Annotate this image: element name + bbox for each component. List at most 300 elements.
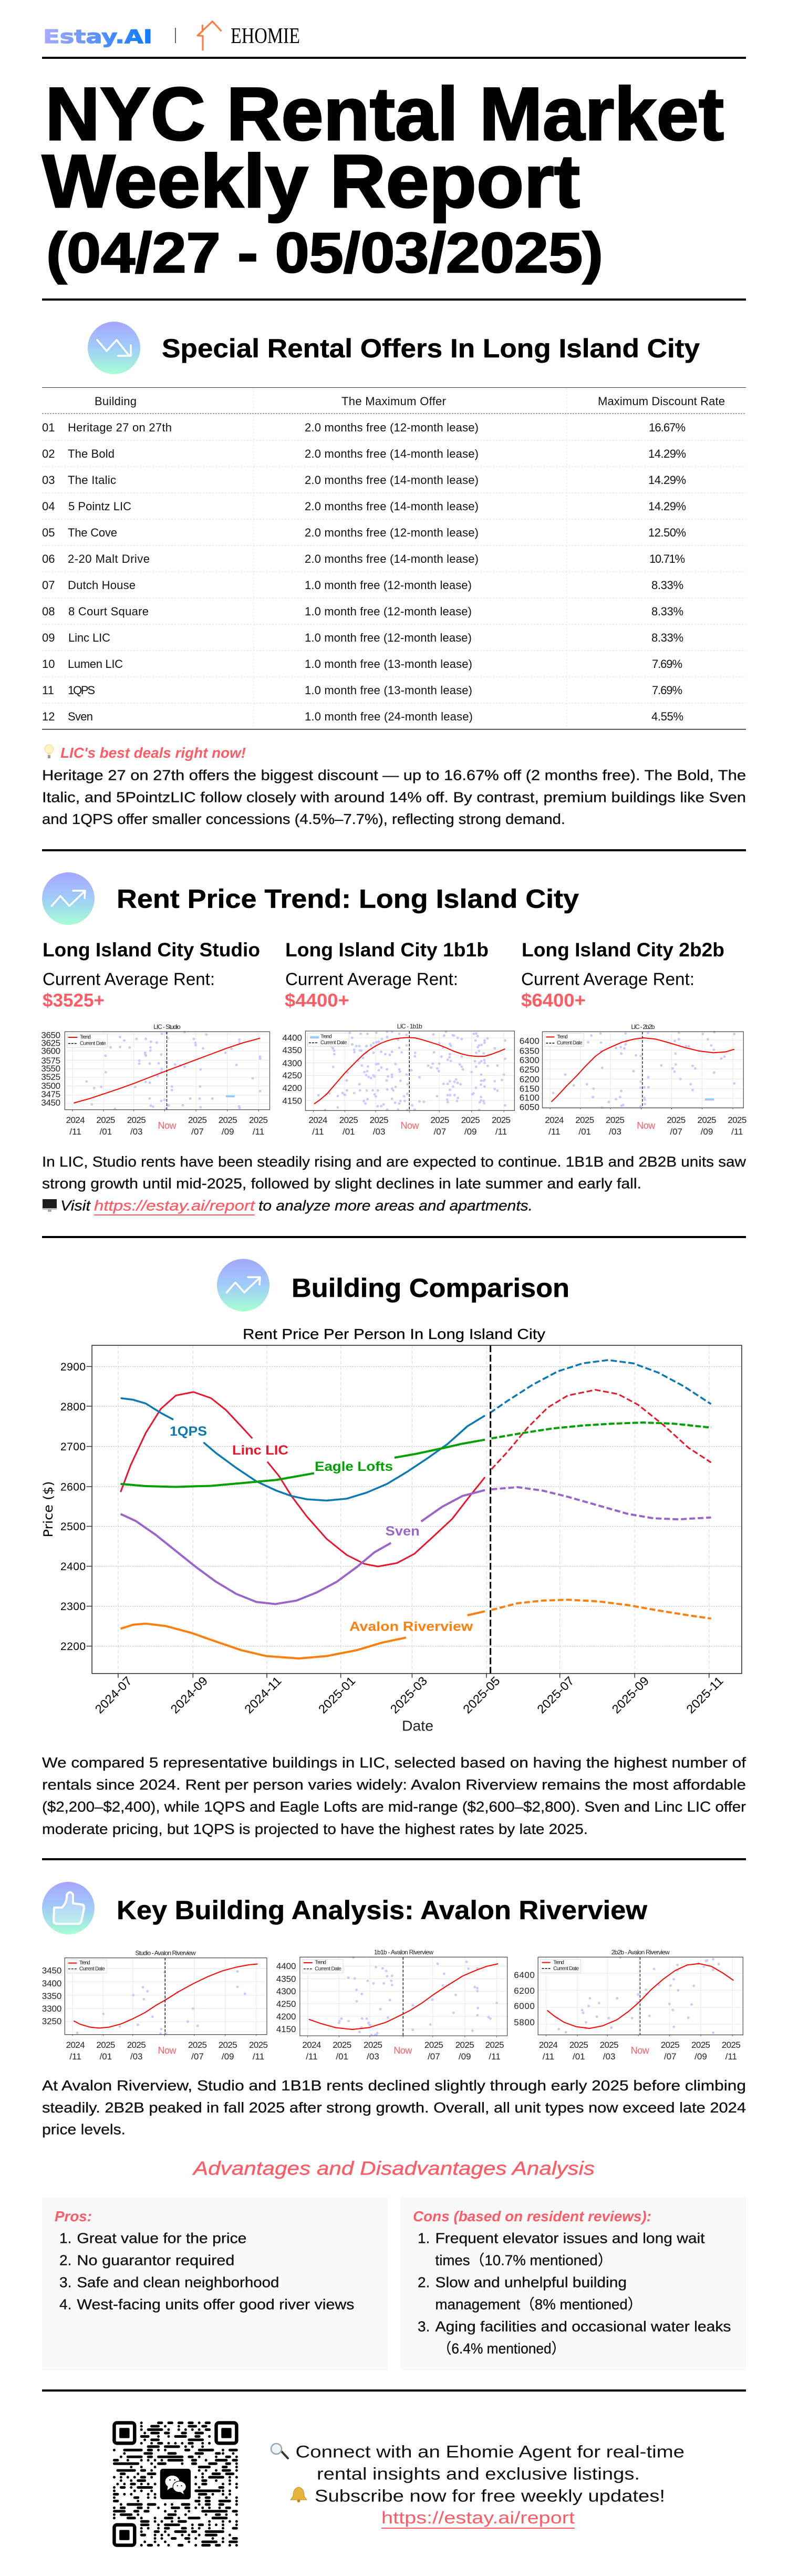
chart: Avalon 2b2b: 2b2b - Avalon Riverview bbox=[611, 1949, 670, 1956]
chart: LIC 2b2b: /03 bbox=[609, 1127, 621, 1137]
chart: Avalon 1b1b: /07 bbox=[428, 2052, 440, 2062]
icon: upward trend bbox=[217, 1259, 269, 1312]
chart: LIC studio: LIC - Studio bbox=[153, 1023, 181, 1031]
table rows: 01 bbox=[42, 421, 55, 434]
icon: monitor bbox=[43, 1199, 57, 1212]
x axis labels: 2025-11 bbox=[683, 1674, 726, 1716]
table rows: 08 bbox=[42, 605, 55, 618]
list: pros: 2. bbox=[59, 2252, 71, 2269]
list: cons bbox=[418, 2230, 731, 2356]
line labels: Linc LIC bbox=[232, 1443, 288, 1458]
chart: LIC studio: 2025 bbox=[249, 1115, 268, 1125]
list: cons: （6.4% mentioned） bbox=[438, 2340, 565, 2356]
x axis labels: 2025-01 bbox=[316, 1674, 358, 1716]
chart: Avalon studio: 2025 bbox=[127, 2040, 146, 2050]
chart: LIC studio: 2025 bbox=[127, 1115, 146, 1125]
chart: Avalon 2b2b: /07 bbox=[664, 2052, 677, 2062]
chart: Avalon 1b1b: /03 bbox=[367, 2052, 379, 2062]
chart: LIC 2b2b: 6400 bbox=[520, 1036, 540, 1046]
chart: LIC 1b1b: /03 bbox=[373, 1127, 385, 1137]
paragraph: LIC trend summary: Visit bbox=[60, 1197, 91, 1214]
chart: Avalon 2b2b: 2025 bbox=[569, 2040, 588, 2050]
line labels bbox=[170, 1424, 473, 1634]
chart: LIC 2b2b bbox=[520, 1023, 746, 1137]
chart: LIC 1b1b: Current Date bbox=[320, 1040, 347, 1046]
chart: Avalon 1b1b: /11 bbox=[306, 2052, 318, 2062]
x axis labels: 2025-09 bbox=[609, 1674, 651, 1716]
chart: LIC 2b2b: /11 bbox=[548, 1127, 561, 1137]
header logos bbox=[43, 22, 300, 50]
chart: LIC 1b1b: 4400 bbox=[282, 1033, 302, 1043]
chart: Avalon studio: /11 bbox=[253, 2052, 264, 2062]
paragraph: building comparison summary bbox=[42, 1754, 746, 1837]
paragraph: Avalon summary bbox=[42, 2077, 746, 2138]
table rows: 1.0 month free (12-month lease) bbox=[305, 631, 472, 644]
table rows: 4.55% bbox=[651, 710, 683, 723]
table rows: 8.33% bbox=[651, 579, 683, 592]
line labels: Avalon Riverview bbox=[349, 1620, 473, 1634]
paragraph: Avalon summary: steadily. 2B2B peaked in fall 2025 after strong growth. Overall, all unit types now exceed late 2024 bbox=[42, 2099, 746, 2116]
chart: Avalon studio: /09 bbox=[222, 2052, 234, 2062]
table rows: 04 bbox=[42, 500, 55, 513]
chart: Avalon 2b2b: /01 bbox=[573, 2052, 585, 2062]
y axis labels: 2400 bbox=[60, 1561, 86, 1573]
chart: Avalon studio: Now bbox=[158, 2045, 177, 2056]
table header: The Maximum Offer bbox=[341, 395, 446, 408]
x axis labels: 2024-11 bbox=[242, 1674, 284, 1716]
callout: best deals bbox=[42, 745, 746, 827]
paragraph: building comparison summary: moderate pricing, but 1QPS is projected to have the highest rates by late 2025. bbox=[42, 1821, 588, 1837]
table rows: 8.33% bbox=[651, 631, 683, 644]
paragraph: LIC trend summary: to analyze more areas and apartments. bbox=[258, 1197, 533, 1214]
table rows: 5 Pointz LIC bbox=[68, 500, 131, 513]
call to action: Subscribe now for free weekly updates! bbox=[315, 2487, 665, 2506]
table rows: Sven bbox=[68, 710, 93, 723]
chart: LIC studio: /03 bbox=[130, 1127, 143, 1137]
chart: LIC 2b2b: 2025 bbox=[575, 1115, 594, 1125]
chart: rent price per person bbox=[41, 1326, 742, 1734]
paragraph: deals summary bbox=[42, 767, 746, 827]
list: pros bbox=[59, 2230, 354, 2312]
chart: LIC studio: 2024 bbox=[66, 1115, 85, 1125]
chart: LIC 2b2b: 6050 bbox=[520, 1102, 540, 1112]
chart: Avalon studio: /03 bbox=[130, 2052, 143, 2062]
chart: LIC studio: 2025 bbox=[96, 1115, 115, 1125]
x axis labels: 2025-05 bbox=[460, 1674, 503, 1716]
table rows: 2-20 Malt Drive bbox=[68, 552, 150, 565]
logo divider bbox=[175, 28, 176, 43]
chart: Avalon studio: Studio - Avalon Riverview bbox=[135, 1950, 196, 1957]
chart: LIC studio: 3625 bbox=[41, 1038, 60, 1048]
list: pros: 3. bbox=[59, 2274, 71, 2291]
heading: special rental offers: Special Rental Offers In Long Island City bbox=[162, 334, 700, 363]
y axis labels: 2700 bbox=[60, 1441, 86, 1453]
y axis labels: 2600 bbox=[60, 1481, 86, 1493]
heading: key building analysis: Key Building Analysis: Avalon Riverview bbox=[117, 1895, 647, 1925]
chart: LIC 2b2b: 2024 bbox=[545, 1115, 564, 1125]
chart: LIC 1b1b: 2025 bbox=[492, 1115, 511, 1125]
paragraph: LIC trend summary bbox=[42, 1153, 746, 1215]
chart: LIC 2b2b: 2025 bbox=[728, 1115, 746, 1125]
list: pros: 1. bbox=[59, 2230, 71, 2247]
panel: 1b1b rent: Current Average Rent: bbox=[285, 969, 458, 989]
paragraph: deals summary: and 1QPS offer smaller concessions (4.5%–7.7%), reflecting strong demand. bbox=[42, 811, 565, 827]
table rows: 11 bbox=[42, 684, 54, 697]
paragraph: LIC trend summary: In LIC, Studio rents have been steadily rising and are expected to continue. 1B1B and 2B2B units saw bbox=[42, 1153, 746, 1170]
icon: thumbs up bbox=[42, 1882, 95, 1934]
chart: Avalon 1b1b: /01 bbox=[336, 2052, 348, 2062]
table rows: 7.69% bbox=[652, 657, 682, 671]
chart: LIC 2b2b: 2025 bbox=[698, 1115, 717, 1125]
table rows: Lumen LIC bbox=[68, 657, 123, 671]
panel: pros: Pros: bbox=[55, 2208, 92, 2224]
chart: Avalon 1b1b: 4150 bbox=[276, 2024, 296, 2034]
chart: Avalon studio: Current Date bbox=[79, 1966, 105, 1972]
chart: LIC studio: 3500 bbox=[41, 1081, 60, 1091]
table rows: 14.29% bbox=[648, 473, 686, 487]
chart: LIC 1b1b: 2025 bbox=[430, 1115, 449, 1125]
call to action bbox=[271, 2443, 685, 2529]
heading: rent price trend bbox=[42, 872, 579, 925]
chart: LIC studio: Current Date bbox=[80, 1040, 106, 1046]
x axis labels: 2025-03 bbox=[388, 1674, 430, 1716]
chart: Avalon studio: /07 bbox=[191, 2052, 204, 2062]
chart: Avalon studio: 3450 bbox=[42, 1965, 61, 1976]
y axis labels: 2200 bbox=[60, 1641, 86, 1653]
table rows: The Italic bbox=[68, 473, 116, 487]
chart: LIC 1b1b: 4300 bbox=[282, 1058, 302, 1068]
paragraph: deals summary: Italic, and 5PointzLIC follow closely with around 14% off. By contrast, premium buildings like Sven bbox=[42, 789, 746, 805]
chart: LIC studio: 3450 bbox=[41, 1098, 60, 1108]
table rows: 10 bbox=[42, 657, 55, 671]
list: pros: No guarantor required bbox=[77, 2252, 234, 2269]
table rows: 06 bbox=[42, 552, 55, 565]
chart: Avalon studio: 3300 bbox=[42, 2004, 61, 2014]
chart: LIC studio: 3650 bbox=[41, 1030, 60, 1040]
chart: Avalon 1b1b: 2025 bbox=[333, 2040, 351, 2050]
paragraph: LIC trend summary: https://estay.ai/report bbox=[94, 1197, 255, 1214]
chart: Avalon 2b2b: /11 bbox=[725, 2052, 737, 2062]
list: cons: Slow and unhelpful building bbox=[435, 2274, 627, 2291]
paragraph: deals summary: Heritage 27 on 27th offers the biggest discount — up to 16.67% off (2 months free). The Bold, The bbox=[42, 767, 746, 783]
chart: Avalon 2b2b: 2025 bbox=[722, 2040, 741, 2050]
chart: LIC 2b2b: Trend bbox=[557, 1034, 568, 1040]
list: cons: 3. bbox=[418, 2319, 430, 2334]
table rows: 2.0 months free (14-month lease) bbox=[305, 500, 479, 513]
chart: LIC studio: 3475 bbox=[41, 1089, 60, 1099]
chart: Avalon studio bbox=[42, 1950, 268, 2062]
table rows: 10.71% bbox=[649, 552, 685, 565]
list: pros: Great value for the price bbox=[77, 2230, 246, 2247]
chart: LIC studio: 3575 bbox=[41, 1056, 60, 1066]
y axis labels: 2800 bbox=[60, 1401, 86, 1413]
chart: Avalon studio: /11 bbox=[69, 2052, 81, 2062]
chart: Avalon 1b1b: 4300 bbox=[276, 1986, 296, 1996]
paragraph: building comparison summary: ($2,200–$2,400), while 1QPS and Eagle Lofts are mid-range ($2,600–$2,800). Sven and Linc LIC offer bbox=[42, 1798, 746, 1815]
title bbox=[42, 73, 724, 284]
chart: LIC 2b2b: 6150 bbox=[520, 1084, 540, 1094]
line labels: Sven bbox=[386, 1524, 420, 1539]
chart: LIC 2b2b: 6250 bbox=[520, 1065, 540, 1075]
panel: cons bbox=[400, 2197, 746, 2371]
chart: Avalon 2b2b: 2025 bbox=[600, 2040, 619, 2050]
table rows: 05 bbox=[42, 526, 55, 539]
heading: rent price trend: Rent Price Trend: Long Island City bbox=[117, 884, 579, 913]
panel: 1b1b rent: $4400+ bbox=[285, 990, 349, 1011]
list: pros: Safe and clean neighborhood bbox=[77, 2274, 279, 2291]
line: Avalon Riverview bbox=[121, 1600, 711, 1658]
heading: key building analysis bbox=[42, 1882, 647, 1934]
paragraph: Avalon summary: price levels. bbox=[42, 2121, 126, 2138]
chart: LIC 1b1b: /07 bbox=[434, 1127, 446, 1137]
chart: Avalon 2b2b: Trend bbox=[553, 1960, 564, 1965]
chart: Avalon 2b2b: Now bbox=[631, 2045, 650, 2056]
chart: LIC studio bbox=[41, 1023, 269, 1137]
list: cons: Frequent elevator issues and long wait bbox=[435, 2230, 705, 2247]
icon: WeChat logo bbox=[160, 2469, 191, 2499]
table rows: 03 bbox=[42, 473, 55, 487]
chart: Avalon 1b1b: /11 bbox=[489, 2052, 501, 2062]
chart: Avalon studio: /01 bbox=[100, 2052, 112, 2062]
table rows: 02 bbox=[42, 447, 55, 460]
table rows: 8.33% bbox=[651, 605, 683, 618]
chart: LIC 1b1b: /11 bbox=[312, 1127, 324, 1137]
chart: LIC studio: /09 bbox=[222, 1127, 234, 1137]
x axis labels: Date bbox=[402, 1717, 433, 1734]
chart: Avalon 1b1b: 2025 bbox=[455, 2040, 474, 2050]
chart: Avalon 2b2b: 2025 bbox=[661, 2040, 680, 2050]
chart: LIC 1b1b: 4250 bbox=[282, 1070, 302, 1080]
table rows: 1QPS bbox=[68, 684, 95, 697]
x axis labels bbox=[92, 1674, 726, 1734]
chart: Avalon studio: 2024 bbox=[66, 2040, 85, 2050]
chart: LIC 1b1b: Now bbox=[400, 1120, 419, 1131]
chart: LIC 1b1b: Trend bbox=[320, 1034, 332, 1039]
chart: Avalon 1b1b: /09 bbox=[459, 2052, 471, 2062]
icon: Ehomie house bbox=[198, 22, 221, 50]
y axis labels: 2900 bbox=[60, 1361, 86, 1373]
icon: bell bbox=[291, 2487, 307, 2502]
table rows: The Bold bbox=[68, 447, 115, 460]
chart: LIC 2b2b: 2025 bbox=[606, 1115, 625, 1125]
chart: Avalon 2b2b: 6400 bbox=[514, 1970, 535, 1980]
table rows: 1.0 month free (12-month lease) bbox=[305, 605, 472, 618]
table header: Building bbox=[95, 395, 137, 408]
chart: LIC studio: 3600 bbox=[41, 1046, 60, 1056]
list: cons: Aging facilities and occasional water leaks bbox=[435, 2319, 731, 2334]
chart: Avalon 2b2b: 2024 bbox=[539, 2040, 558, 2050]
chart: LIC 1b1b: 2025 bbox=[370, 1115, 389, 1125]
line: 1QPS bbox=[121, 1360, 711, 1501]
icon: magnifying glass bbox=[271, 2444, 288, 2458]
chart: Avalon 1b1b: 2025 bbox=[364, 2040, 382, 2050]
heading: building comparison: Building Comparison bbox=[292, 1273, 569, 1303]
table rows: 12 bbox=[42, 710, 55, 723]
panel: studio rent: Current Average Rent: bbox=[43, 969, 215, 989]
call to action: rental insights and exclusive listings. bbox=[317, 2465, 640, 2484]
chart: LIC 1b1b: /01 bbox=[343, 1127, 355, 1137]
panel: 2b2b rent: Long Island City 2b2b bbox=[522, 939, 724, 961]
chart: Avalon 1b1b bbox=[276, 1949, 507, 2062]
list: cons: 2. bbox=[418, 2274, 430, 2291]
chart: Avalon 1b1b: 4200 bbox=[276, 2012, 296, 2022]
list: cons: 1. bbox=[418, 2230, 430, 2247]
paragraph: building comparison summary: We compared 5 representative buildings in LIC, selected based on having the highest number of bbox=[42, 1754, 746, 1771]
panel: 2b2b rent: Current Average Rent: bbox=[521, 969, 694, 989]
panel: cons: Cons (based on resident reviews): bbox=[413, 2208, 651, 2224]
chart: LIC studio: /11 bbox=[69, 1127, 81, 1137]
QR code bbox=[114, 2423, 236, 2545]
line: Linc LIC bbox=[121, 1390, 711, 1567]
chart: Avalon studio: 2025 bbox=[249, 2040, 268, 2050]
chart: LIC 2b2b: 6300 bbox=[520, 1055, 540, 1065]
chart: Avalon 1b1b: 2025 bbox=[424, 2040, 443, 2050]
link: report url: https://estay.ai/report bbox=[381, 2508, 575, 2527]
chart: LIC 2b2b: Now bbox=[637, 1120, 656, 1131]
table rows bbox=[42, 421, 686, 723]
paragraph: LIC trend summary: strong growth until mid-2025, followed by slight declines in late summer and early fall. bbox=[42, 1175, 641, 1192]
y axis labels bbox=[41, 1361, 86, 1653]
callout: best deals: LIC's best deals right now! bbox=[60, 745, 246, 761]
chart: Avalon studio: 3350 bbox=[42, 1991, 61, 2001]
chart: LIC 1b1b: 4200 bbox=[282, 1083, 302, 1093]
chart: Avalon 1b1b: 2024 bbox=[302, 2040, 321, 2050]
chart: LIC 1b1b: LIC - 1b1b bbox=[397, 1023, 422, 1030]
chart: Avalon 2b2b: /11 bbox=[543, 2052, 554, 2062]
chart: LIC 2b2b: /01 bbox=[578, 1127, 591, 1137]
chart: LIC studio: Now bbox=[158, 1120, 177, 1131]
table rows: 14.29% bbox=[648, 500, 686, 513]
table rows: 2.0 months free (14-month lease) bbox=[305, 552, 479, 565]
table rows: 1.0 month free (24-month lease) bbox=[305, 710, 473, 723]
chart: Avalon 1b1b: Current Date bbox=[315, 1966, 341, 1972]
chart: LIC 1b1b: 4150 bbox=[282, 1096, 302, 1106]
panel: 1b1b rent: Long Island City 1b1b bbox=[285, 939, 489, 961]
table rows: 7.69% bbox=[652, 684, 682, 697]
x axis labels: 2024-09 bbox=[168, 1674, 210, 1716]
chart: Avalon studio: Trend bbox=[79, 1960, 90, 1966]
table rows: 2.0 months free (14-month lease) bbox=[305, 473, 479, 487]
chart: Avalon 2b2b bbox=[514, 1949, 743, 2062]
chart: Avalon 1b1b: Now bbox=[393, 2045, 412, 2056]
icon: upward trend bbox=[42, 872, 95, 925]
icon: downward trend bbox=[88, 322, 140, 374]
chart: LIC 2b2b: /07 bbox=[670, 1127, 682, 1137]
chart: Avalon 1b1b: 4250 bbox=[276, 1999, 296, 2009]
chart: Avalon 2b2b: 2025 bbox=[691, 2040, 710, 2050]
table rows: The Cove bbox=[68, 526, 117, 539]
chart: Avalon studio: 2025 bbox=[188, 2040, 207, 2050]
panel: studio rent: $3525+ bbox=[43, 990, 105, 1011]
y axis labels: 2500 bbox=[60, 1521, 86, 1533]
chart: LIC studio: 3525 bbox=[41, 1072, 60, 1082]
table rows: 2.0 months free (14-month lease) bbox=[305, 447, 479, 460]
logo: EHOMIE: EHOMIE bbox=[231, 24, 300, 48]
chart: LIC studio: 3550 bbox=[41, 1064, 60, 1074]
table rows: 07 bbox=[42, 579, 55, 592]
table rows: 14.29% bbox=[648, 447, 686, 460]
table rows: 2.0 months free (12-month lease) bbox=[305, 526, 479, 539]
list: cons: times（10.7% mentioned） bbox=[435, 2252, 613, 2269]
chart: Avalon 1b1b: 2025 bbox=[485, 2040, 504, 2050]
chart: Avalon 1b1b: 4400 bbox=[276, 1961, 296, 1971]
panel: 1b1b rent bbox=[285, 939, 489, 1011]
title: NYC Rental Market bbox=[45, 73, 724, 156]
call to action: Connect with an Ehomie Agent for real-time bbox=[295, 2443, 685, 2461]
chart: LIC 1b1b bbox=[282, 1023, 514, 1137]
chart: LIC studio: 2025 bbox=[219, 1115, 237, 1125]
y axis labels: Price ($) bbox=[41, 1481, 56, 1538]
chart: LIC studio: /11 bbox=[253, 1127, 264, 1137]
chart: LIC studio: Trend bbox=[80, 1035, 91, 1040]
chart: Avalon 1b1b: Trend bbox=[315, 1960, 326, 1965]
chart: LIC 1b1b: 2025 bbox=[339, 1115, 358, 1125]
chart: Avalon studio: 2025 bbox=[96, 2040, 115, 2050]
y axis labels: 2300 bbox=[60, 1601, 86, 1613]
chart: LIC 2b2b: 2025 bbox=[667, 1115, 686, 1125]
table rows: Linc LIC bbox=[68, 631, 110, 644]
chart: Avalon 2b2b: Current Date bbox=[553, 1966, 579, 1972]
chart: Avalon studio: 3400 bbox=[42, 1979, 61, 1988]
chart: Avalon 2b2b: 6000 bbox=[514, 2001, 535, 2011]
table rows: Heritage 27 on 27th bbox=[68, 421, 172, 434]
chart: LIC studio: /07 bbox=[191, 1127, 204, 1137]
line: Eagle Lofts bbox=[121, 1423, 711, 1487]
chart: LIC 2b2b: /11 bbox=[731, 1127, 743, 1137]
chart: LIC 2b2b: LIC - 2b2b bbox=[631, 1023, 655, 1031]
chart: rent price per person: Rent Price Per Person In Long Island City bbox=[243, 1326, 545, 1342]
table rows: 16.67% bbox=[649, 421, 686, 434]
chart: Avalon 1b1b: 4350 bbox=[276, 1974, 296, 1984]
paragraph: Avalon summary: At Avalon Riverview, Studio and 1B1B rents declined slightly through early 2025 before climbing bbox=[42, 2077, 746, 2094]
panel: 2b2b rent: $6400+ bbox=[521, 990, 586, 1011]
panel: 2b2b rent bbox=[521, 939, 724, 1011]
chart: Avalon 1b1b: 1b1b - Avalon Riverview bbox=[374, 1949, 433, 1956]
chart: Avalon studio: 2025 bbox=[219, 2040, 237, 2050]
table header bbox=[95, 395, 725, 408]
chart: LIC 1b1b: 2025 bbox=[461, 1115, 480, 1125]
chart: Avalon studio: 3250 bbox=[42, 2016, 61, 2026]
table rows: Dutch House bbox=[68, 579, 136, 592]
list: pros: West-facing units offer good river views bbox=[77, 2296, 354, 2312]
chart: LIC 1b1b: /09 bbox=[464, 1127, 477, 1137]
panel: studio rent: Long Island City Studio bbox=[43, 939, 260, 961]
table rows: 2.0 months free (12-month lease) bbox=[305, 421, 479, 434]
table header: Maximum Discount Rate bbox=[598, 395, 725, 408]
icon: light bulb bbox=[45, 745, 54, 758]
line labels: 1QPS bbox=[170, 1424, 207, 1439]
chart: Avalon 2b2b: 5800 bbox=[514, 2017, 535, 2027]
chart: LIC 2b2b: 6100 bbox=[520, 1093, 540, 1102]
table rows: 12.50% bbox=[648, 526, 686, 539]
paragraph: building comparison summary: rentals since 2024. Rent per person varies widely: Avalon Riverview remains the most affordable bbox=[42, 1776, 746, 1793]
chart: LIC studio: 2025 bbox=[188, 1115, 207, 1125]
chart: LIC 1b1b: 2024 bbox=[308, 1115, 327, 1125]
chart: Avalon 2b2b: /03 bbox=[603, 2052, 615, 2062]
table: rental offers bbox=[42, 387, 746, 729]
table rows: 8 Court Square bbox=[68, 605, 149, 618]
chart: LIC 2b2b: 6350 bbox=[520, 1046, 540, 1056]
chart: LIC studio: /01 bbox=[100, 1127, 112, 1137]
panel: studio rent bbox=[43, 939, 260, 1011]
title: Weekly Report bbox=[42, 140, 580, 223]
chart: Avalon 2b2b: 6200 bbox=[514, 1986, 535, 1996]
table rows: 1.0 month free (12-month lease) bbox=[305, 579, 472, 592]
title: (04/27 - 05/03/2025) bbox=[46, 221, 603, 284]
x axis labels: 2025-07 bbox=[534, 1674, 577, 1716]
panel: pros bbox=[42, 2197, 388, 2371]
chart: LIC 1b1b: /11 bbox=[495, 1127, 507, 1137]
